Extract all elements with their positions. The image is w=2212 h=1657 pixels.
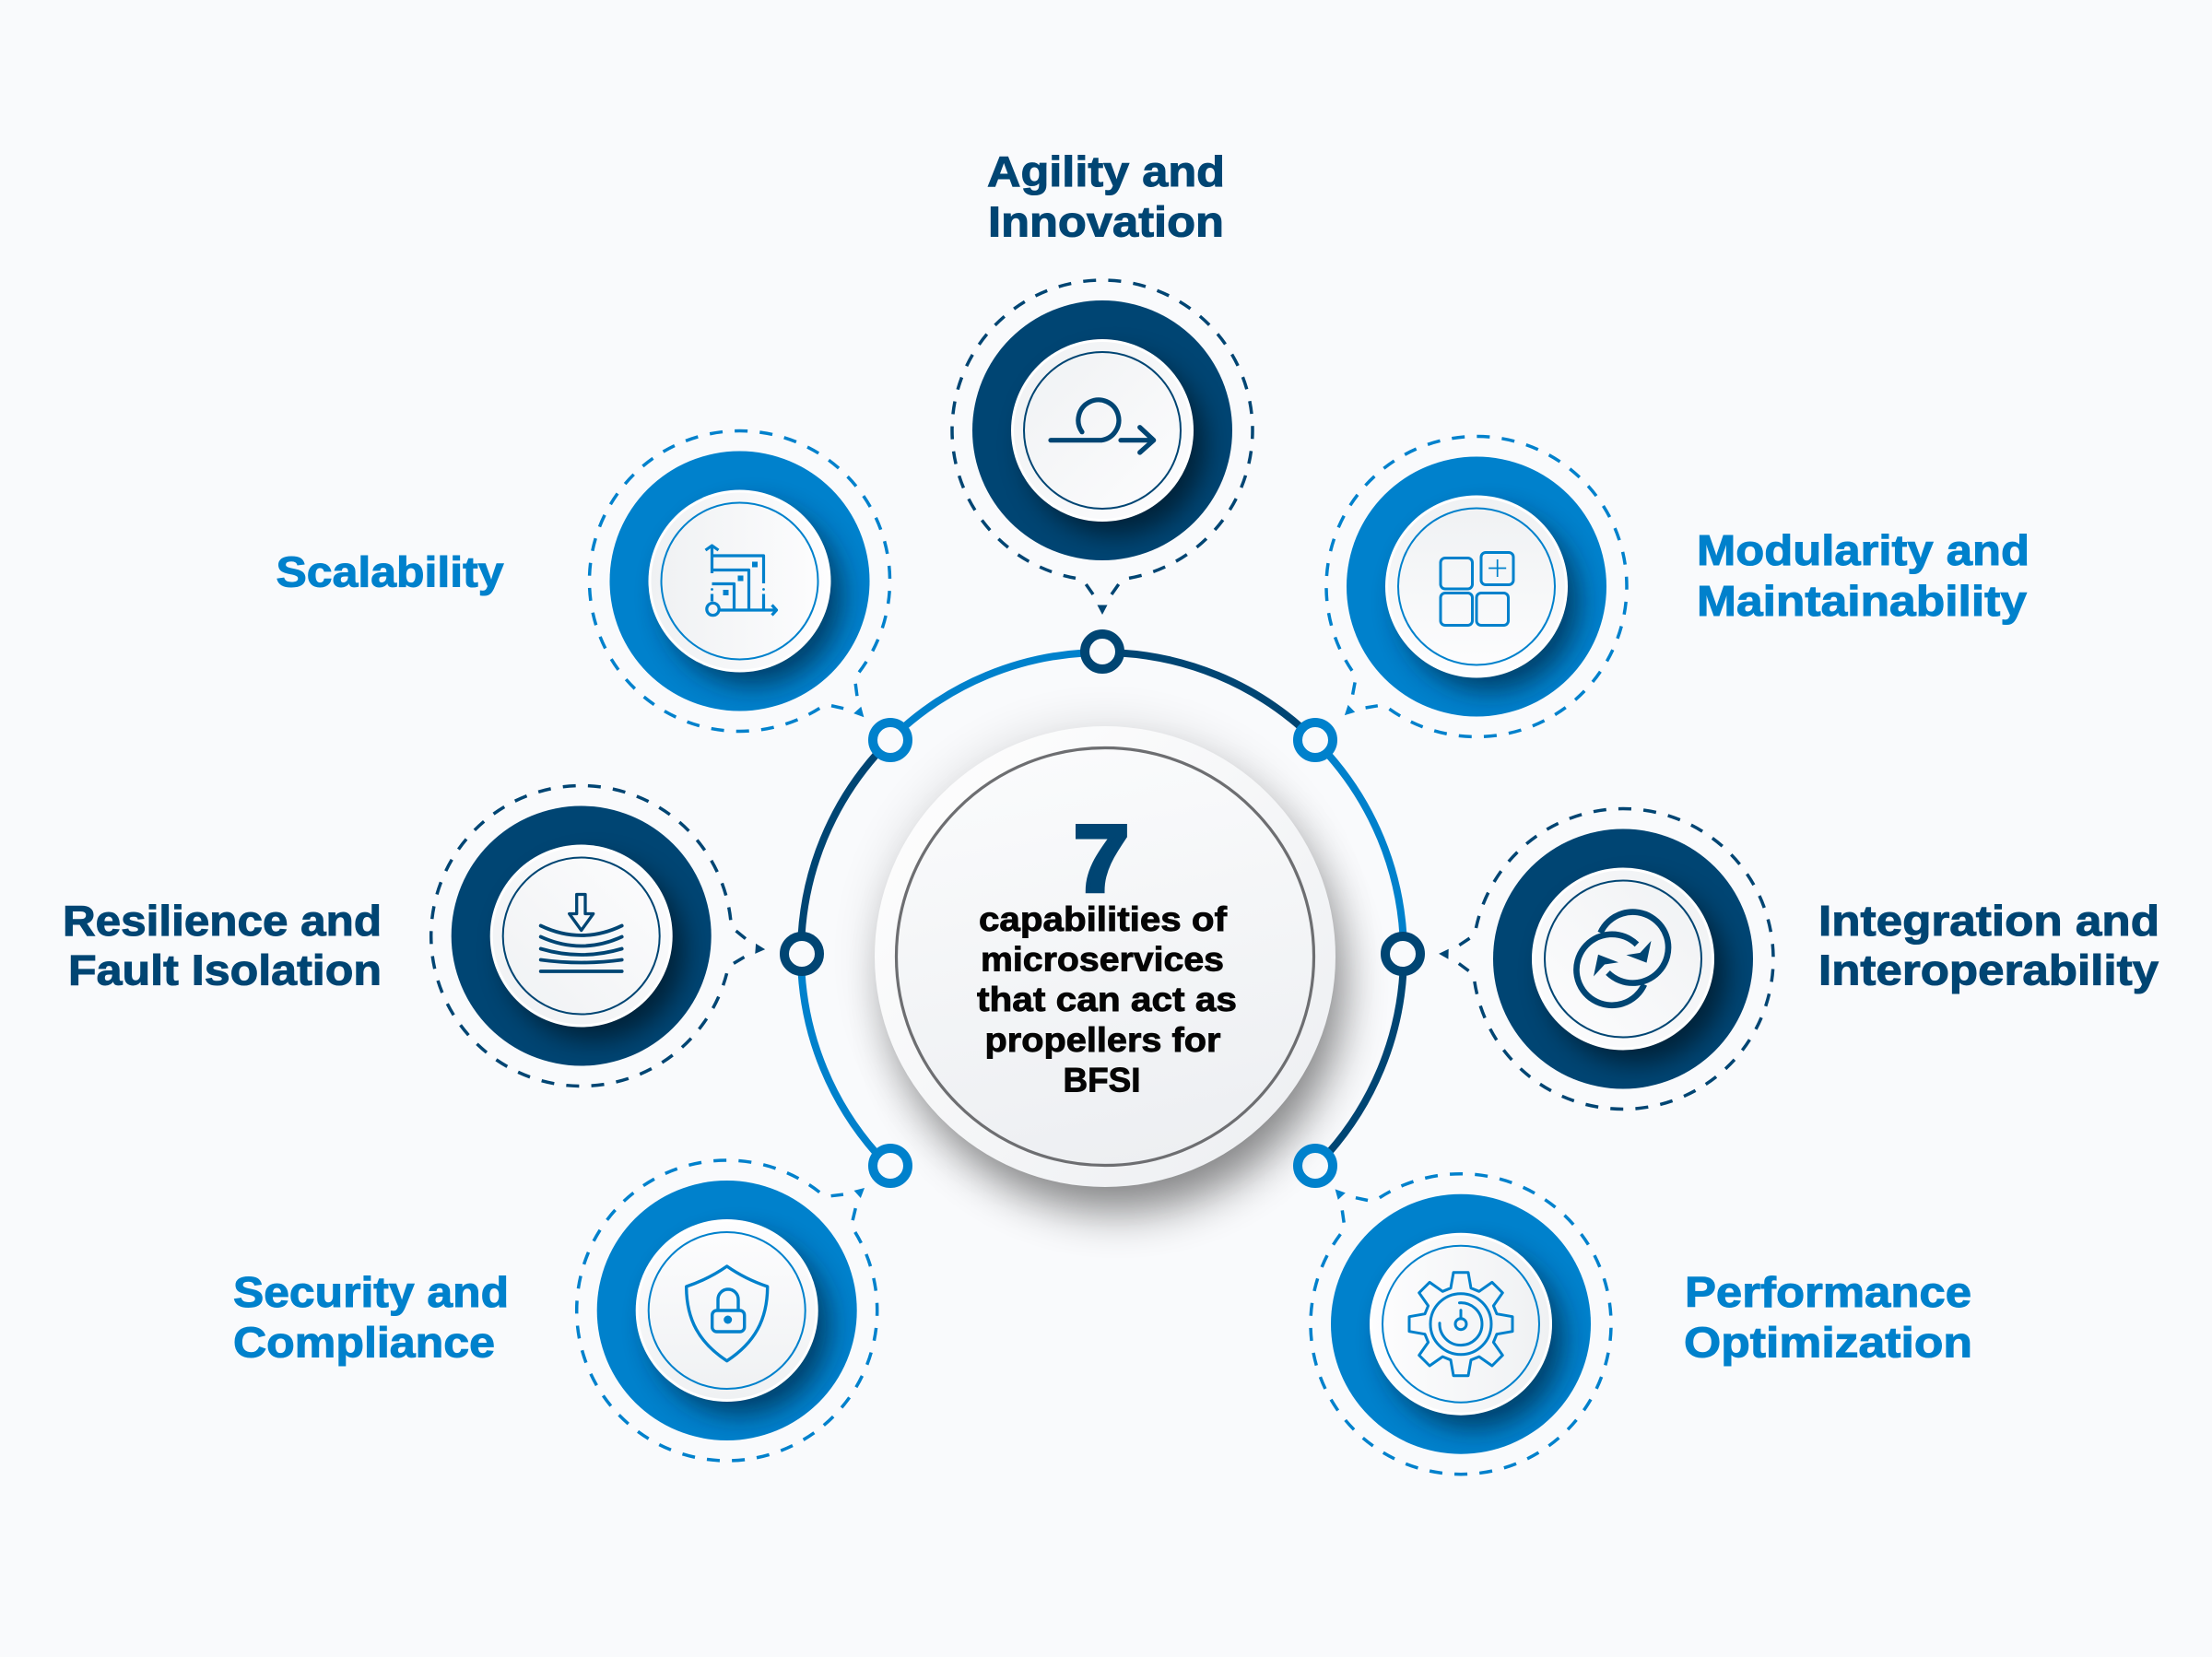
- badge: resilience: [452, 805, 712, 1065]
- panel: Agility and Innovation: [952, 147, 1253, 615]
- center disc shadow: [871, 723, 1343, 1213]
- panel: Security and Compliance: [234, 1158, 879, 1463]
- badge: scalability: [610, 452, 870, 711]
- icon: absorbing layers: [541, 894, 622, 971]
- badge: integration: [1493, 829, 1753, 1089]
- heading: integration: Interoperability: [1818, 946, 2159, 993]
- heading: performance: Performance: [1685, 1268, 1971, 1316]
- connecting ring arcs: [802, 653, 1403, 1153]
- heading: resilience: Resilience and: [63, 897, 382, 945]
- heading: modularity: Maintainability: [1697, 577, 2027, 625]
- center number: 7: [1074, 806, 1129, 911]
- center text: that can act as: [977, 981, 1237, 1018]
- center disc: [875, 726, 1335, 1187]
- dashed pointer: performance: [1225, 1087, 1673, 1536]
- panel: Modularity and Maintainability: [1240, 374, 2030, 823]
- heading: performance: Optimization: [1684, 1318, 1972, 1366]
- dashed pointer: scalability: [527, 369, 975, 818]
- heading: scalability: Scalability: [276, 547, 504, 595]
- icon: modules grid: [1441, 553, 1513, 625]
- icon: shield lock: [687, 1266, 768, 1361]
- heading: agility: [987, 147, 1225, 245]
- heading: performance: [1684, 1268, 1972, 1366]
- panel: Integration and Interoperability: [1435, 804, 2159, 1113]
- panel: Scalability: [276, 369, 975, 818]
- center text: [977, 900, 1237, 1099]
- heading: integration: [1818, 897, 2159, 993]
- heading: resilience: Fault Isolation: [68, 946, 382, 993]
- heading: agility: Innovation: [988, 197, 1224, 245]
- heading: resilience: [63, 897, 382, 993]
- icon: sync arrows: [1576, 912, 1668, 1005]
- badge: modularity: [1347, 457, 1606, 717]
- dashed pointer: resilience: [420, 775, 776, 1099]
- panel: Performance Optimization: [1309, 1172, 1971, 1476]
- badge: security: [597, 1181, 857, 1440]
- heading: agility: Agility and: [987, 147, 1225, 195]
- heading: security: Compliance: [233, 1318, 495, 1366]
- dashed pointer: security: [515, 1075, 964, 1522]
- badge: agility: [972, 300, 1232, 560]
- icon: gear gauge: [1409, 1273, 1512, 1376]
- dashed pointer: agility: [952, 280, 1253, 615]
- badge: performance: [1331, 1194, 1591, 1454]
- center text: microservices: [981, 940, 1224, 979]
- heading: integration: Integration and: [1818, 897, 2159, 945]
- center text: BFSI: [1064, 1062, 1141, 1099]
- heading: security: Security and: [233, 1268, 509, 1316]
- dashed pointer: modularity: [1240, 374, 1688, 823]
- heading: modularity: [1697, 526, 2030, 625]
- icon: scaling squares: [706, 546, 776, 616]
- dashed pointer: integration: [1435, 804, 1777, 1113]
- heading: modularity: Modularity and: [1697, 526, 2030, 574]
- heading: security: [233, 1268, 509, 1366]
- center text: propellers for: [984, 1021, 1220, 1059]
- ring nodes: [784, 634, 1420, 1183]
- icon: loop arrow: [1051, 400, 1154, 452]
- center text: capabilities of: [979, 900, 1228, 938]
- panel: Resilience and Fault Isolation: [63, 775, 776, 1099]
